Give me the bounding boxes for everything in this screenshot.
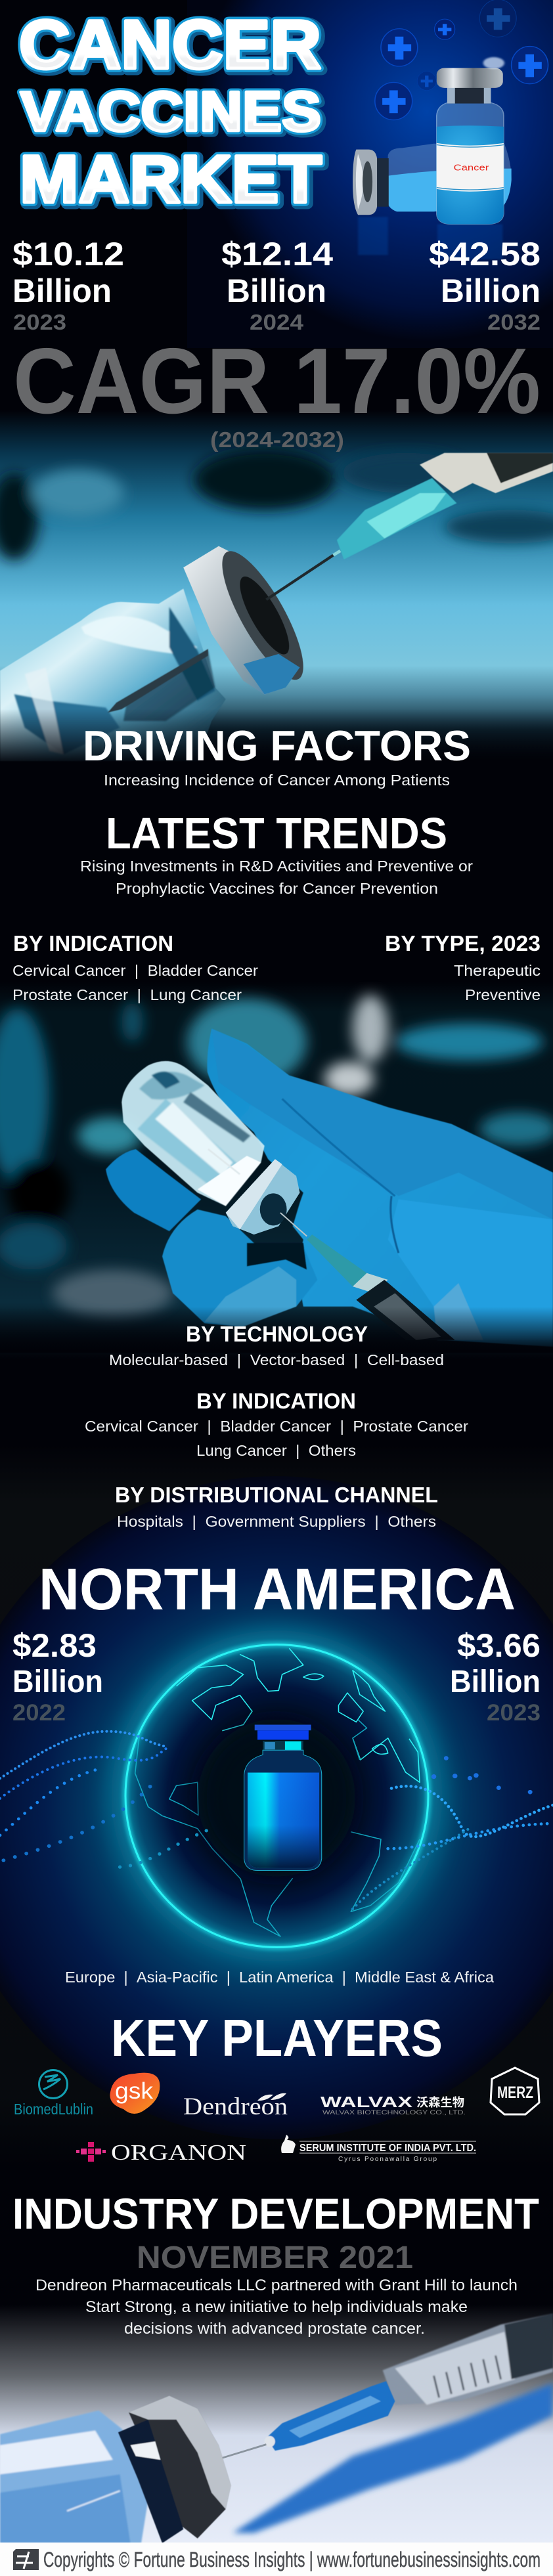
driving factor description: Increasing Incidence of Cancer Among Patients — [104, 772, 450, 789]
logo: Biomed Lublin — [14, 2070, 93, 2118]
photo: gloved hand holding vial — [0, 982, 553, 1359]
by distributional channel — [115, 1483, 438, 1530]
by indication, centre: BY INDICATION — [196, 1389, 356, 1413]
latest trends description: Rising Investments in R&D Activities and Preventive or — [80, 858, 473, 875]
indication items — [85, 1418, 468, 1459]
value 2023: $3.66 — [457, 1627, 541, 1664]
value 2022: 2022 — [12, 1700, 66, 1726]
value 2024 — [221, 236, 333, 334]
glove: thumb — [106, 1149, 201, 1231]
value 2022: $2.83 — [12, 1627, 97, 1664]
logo: Organon: ORGANON — [111, 2141, 246, 2165]
glass vial — [122, 1061, 265, 1206]
icon: medical plus bubbles — [375, 0, 548, 120]
value 2032 — [429, 236, 541, 334]
industry development description: Start Strong, a new initiative to help individuals make — [85, 2298, 468, 2316]
photo: syringe and vial — [0, 410, 553, 765]
blurred lab background — [0, 995, 553, 1317]
blue needle hub — [265, 2381, 395, 2451]
footer — [0, 2543, 553, 2576]
indication items: Lung Cancer | Others — [196, 1442, 356, 1459]
technology items: Molecular-based | Vector-based | Cell-based — [109, 1351, 444, 1368]
driving factors: DRIVING FACTORS — [83, 722, 471, 770]
type items — [454, 962, 541, 1003]
vial reflection — [358, 217, 502, 259]
continents outlines — [135, 1648, 420, 1936]
value 2023: 2023 — [13, 310, 66, 334]
indication items: Cervical Cancer | Bladder Cancer — [12, 962, 258, 979]
logo: Merz: MERZ — [497, 2084, 533, 2102]
particle waves — [0, 1732, 553, 1909]
lying vial — [353, 144, 512, 215]
icon: cancer vaccine vials — [353, 57, 512, 259]
syringe barrel — [383, 2313, 553, 2405]
logo: Serum Institute of India: Cyrus Poonawalla Group — [338, 2156, 437, 2163]
title — [19, 7, 324, 218]
industry development description: Dendreon Pharmaceuticals LLC partnered with Grant Hill to launch — [35, 2277, 518, 2294]
logo: Walvax: WALVAX — [321, 2093, 413, 2110]
indication items: Cervical Cancer | Bladder Cancer | Prostate Cancer — [85, 1418, 468, 1435]
industry development description — [35, 2277, 518, 2338]
type items: Preventive — [465, 986, 541, 1003]
icon: blue vaccine bottle — [244, 1725, 322, 1870]
logo: Walvax: WALVAX BIOTECHNOLOGY CO., LTD. — [322, 2109, 466, 2116]
industry development date: NOVEMBER 2021 — [137, 2240, 413, 2275]
syringe barrel — [420, 453, 553, 493]
vial body — [0, 588, 226, 761]
latest trends — [80, 809, 473, 897]
value 2032: $42.58 — [429, 236, 541, 273]
title line: VACCINES: VACCINES — [22, 82, 323, 144]
logo: Walvax — [321, 2093, 466, 2116]
standing vial — [437, 57, 504, 224]
blurred background bokeh — [0, 450, 553, 560]
glass vial — [0, 2411, 152, 2544]
vial label text: Cancer — [454, 163, 489, 172]
cyan hub — [337, 478, 456, 559]
logo: Serum Institute of India: SERUM INSTITUTE OF INDIA PVT. LTD. — [299, 2143, 476, 2154]
value 2024: 2024 — [250, 310, 304, 334]
indication items — [12, 962, 258, 1003]
by indication, centre — [85, 1389, 468, 1459]
bottle halo — [198, 1719, 355, 1877]
syringe — [280, 1213, 455, 1340]
value 2024: $12.14 — [221, 236, 333, 273]
value 2023 — [12, 236, 124, 334]
title line: CANCER: CANCER — [21, 8, 323, 85]
glove: lower fingers — [162, 1210, 317, 1326]
logo: Serum Institute of India — [281, 2135, 476, 2163]
title line: VACCINES: VACCINES — [20, 81, 321, 143]
type items: Therapeutic — [454, 962, 541, 979]
value 2023: $10.12 — [12, 236, 124, 273]
market values — [12, 236, 541, 334]
title line: MARKET: MARKET — [20, 142, 322, 217]
latest trends description — [80, 858, 473, 897]
value 2023 — [450, 1627, 541, 1726]
latest trends description: Prophylactic Vaccines for Cancer Prevention — [116, 880, 438, 897]
value 2023: Billion — [450, 1665, 541, 1699]
panel: header background glow — [187, 0, 553, 348]
title line: MARKET: MARKET — [20, 142, 322, 217]
value 2024: Billion — [227, 273, 326, 309]
icon: footer logo — [13, 2549, 39, 2570]
CAGR period: (2024-2032) — [210, 427, 344, 452]
needle — [266, 551, 340, 600]
value 2022 — [12, 1627, 103, 1726]
by indication, top left — [12, 931, 258, 1003]
indication items: Prostate Cancer | Lung Cancer — [12, 986, 242, 1003]
latest trends: LATEST TRENDS — [106, 809, 447, 858]
value 2023: 2023 — [487, 1700, 541, 1726]
photo: vial and blue syringe — [0, 2305, 553, 2544]
logo: Walvax: 沃森生物 — [416, 2096, 464, 2109]
industry development description: decisions with advanced prostate cancer. — [124, 2320, 425, 2338]
title line: CANCER: CANCER — [19, 7, 321, 83]
other regions: Europe | Asia-Pacific | Latin America | Middle East & Africa — [65, 1969, 494, 1986]
value 2032: Billion — [441, 273, 541, 309]
glowing ring — [125, 1644, 428, 1948]
needle — [222, 2445, 266, 2458]
by distributional channel: BY DISTRIBUTIONAL CHANNEL — [115, 1483, 438, 1507]
logo: GSK — [110, 2073, 160, 2114]
title line: VACCINES: VACCINES — [20, 81, 321, 143]
by technology — [109, 1322, 444, 1368]
globe — [112, 1630, 443, 1961]
vial cap — [226, 1159, 299, 1234]
value 2023: Billion — [12, 273, 112, 309]
value 2032: 2032 — [487, 310, 541, 334]
value 2022: Billion — [12, 1665, 103, 1699]
by technology: BY TECHNOLOGY — [186, 1322, 368, 1346]
channel items: Hospitals | Government Suppliers | Others — [117, 1513, 436, 1530]
logo: Biomed Lublin: BiomedLublin — [14, 2101, 93, 2118]
panel: north america background — [0, 1445, 553, 2167]
logo: Merz — [491, 2068, 539, 2114]
title line: CANCER: CANCER — [19, 7, 321, 83]
metal cap — [183, 542, 318, 695]
heading: north america: NORTH AMERICA — [39, 1557, 516, 1623]
glove: palm and index finger — [207, 1028, 553, 1347]
logo: Organon — [76, 2141, 246, 2165]
logo: Dendreon: Dendreon — [183, 2093, 288, 2120]
blurred shadow of syringe — [232, 2383, 553, 2533]
by type 2023 — [385, 931, 541, 1003]
by type 2023: BY TYPE, 2023 — [385, 931, 541, 955]
logo: GSK: gsk — [115, 2078, 154, 2104]
title line: MARKET: MARKET — [22, 143, 324, 218]
metal cap — [118, 2396, 231, 2543]
heading: key players: KEY PLAYERS — [111, 2009, 443, 2067]
by indication, top left: BY INDICATION — [13, 931, 173, 955]
